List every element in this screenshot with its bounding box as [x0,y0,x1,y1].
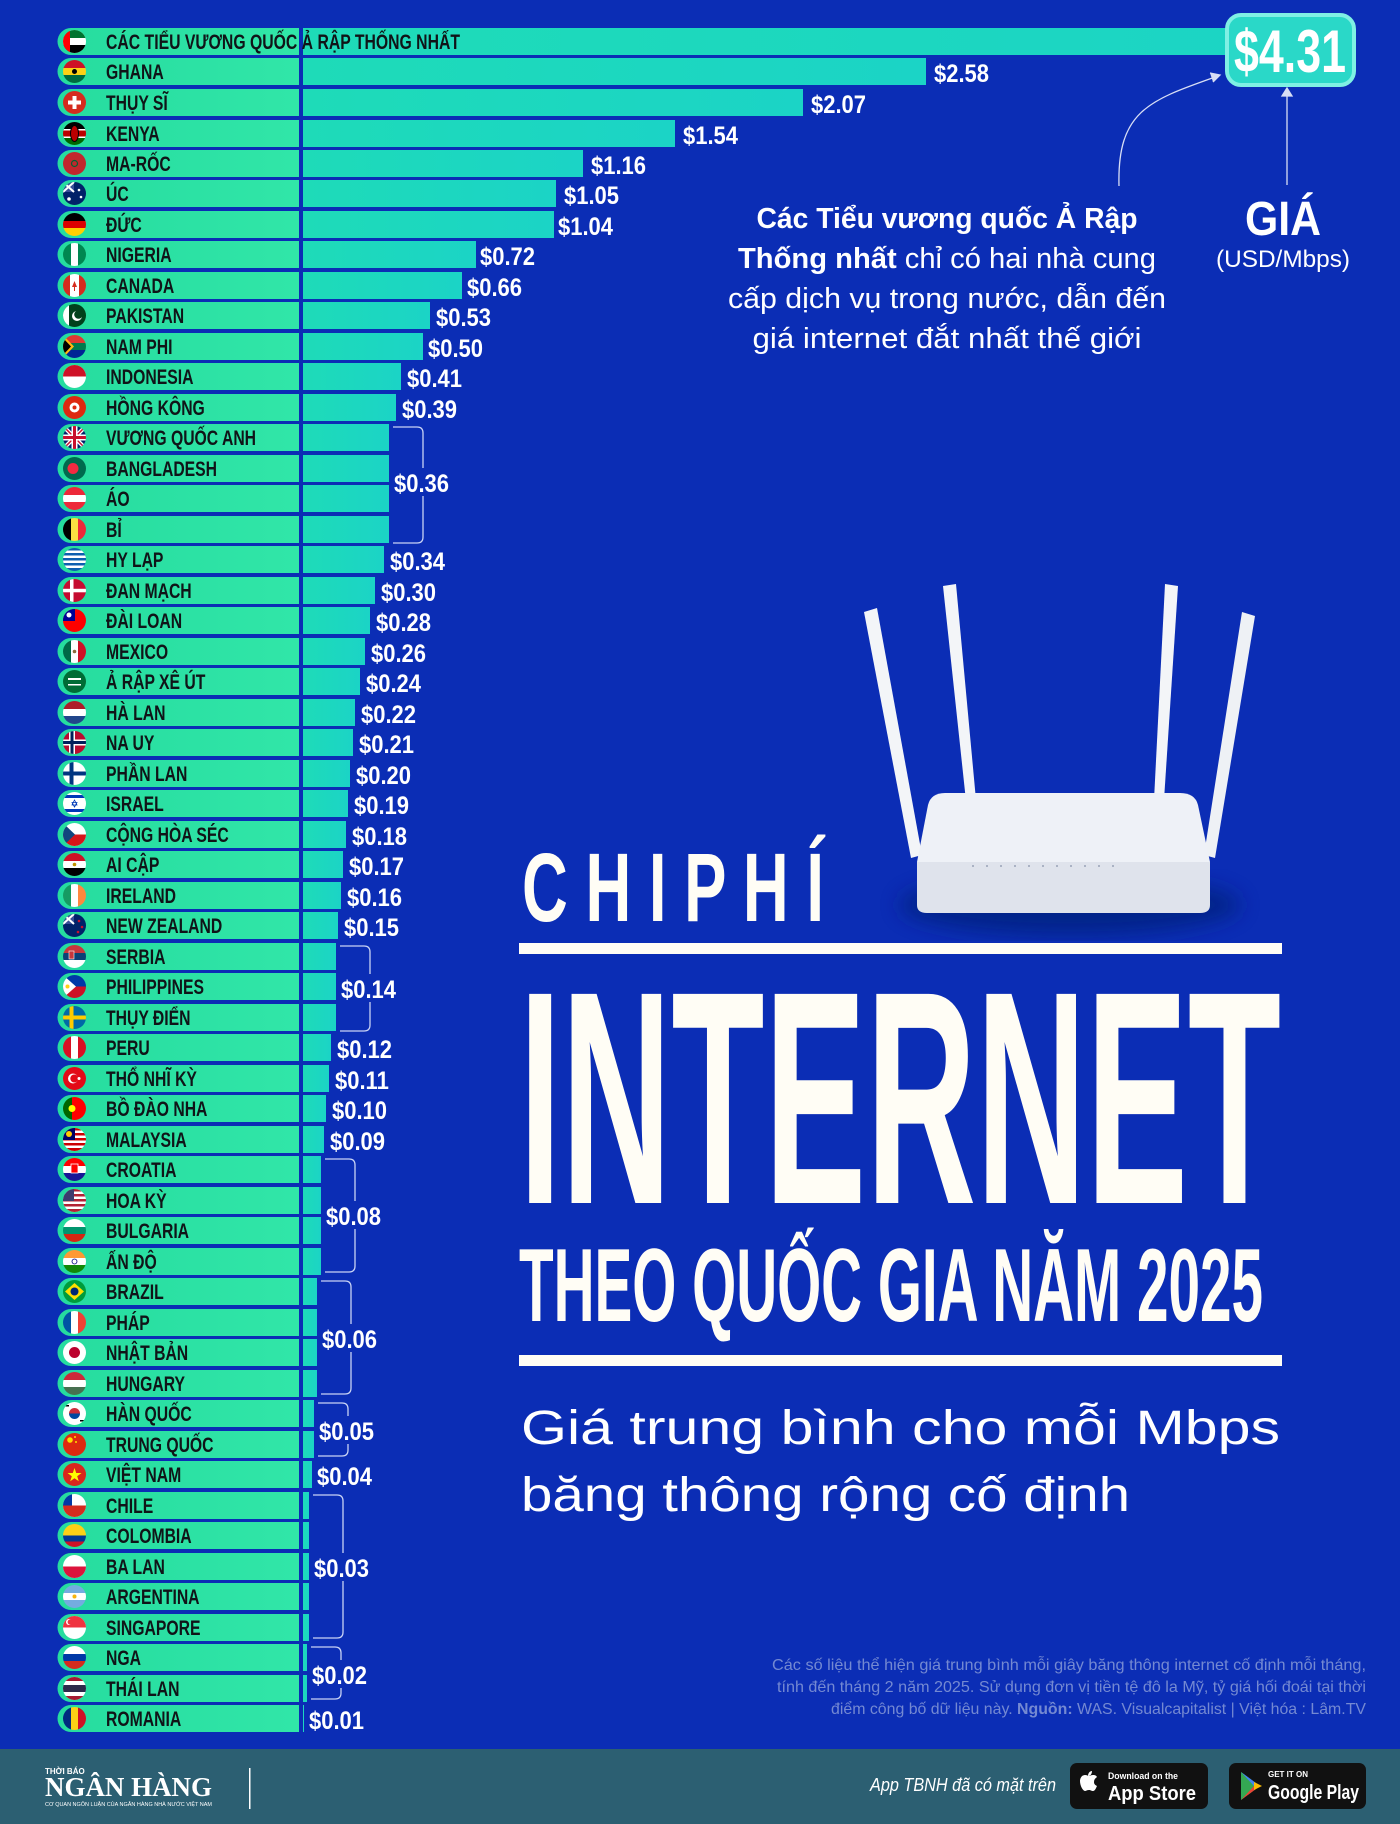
row: A Rap Xe Ut: Ả RẬP XÊ ÚT [106,670,206,694]
row: Singapore: SINGAPORE [106,1616,200,1640]
row: Thuy Si: THỤY SĨ [106,91,169,115]
row: Ao [58,485,389,512]
row: Malaysia: MALAYSIA [106,1128,187,1152]
row: Chile [58,1492,309,1519]
row: Croatia: CROATIA [106,1158,177,1182]
title: CHI PHI: C H I P H Í [522,833,826,942]
row: Bangladesh [58,455,389,482]
row: Indonesia: $0.41 [407,365,462,392]
row: Brazil [58,1278,317,1305]
group bracket: $0.05 [317,1403,377,1456]
row: Hungary [58,1370,317,1397]
row: Philippines [58,973,336,1000]
row: UAE: CÁC TIỂU VƯƠNG QUỐC Ả RẬP THỐNG NHẤT [106,30,460,54]
row: Peru: PERU [106,1036,150,1060]
row: Viet Nam [58,1461,372,1490]
row: Nga: NGA [106,1646,141,1670]
divider: bottom title line [519,1355,1282,1366]
badge: Google Play [1229,1763,1366,1809]
footnote: source: Các số liệu thể hiện giá trung bình mỗi giây băng thông internet cố định mỗi tháng, [772,1655,1366,1674]
row: Romania [58,1705,364,1734]
group bracket: $0.02 [310,1647,370,1699]
row: Uc: ÚC [106,182,129,206]
row: Ghana [58,58,989,87]
callout: UAE explanation [728,201,1166,355]
row: Nhat Ban: NHẬT BẢN [106,1341,188,1365]
row: Nhat Ban [58,1339,317,1366]
row: A Rap Xe Ut: $0.24 [366,670,421,697]
row: Israel: ISRAEL [106,792,164,816]
row: Nigeria [58,241,535,270]
row: Tho Nhi Ky: THỔ NHĨ KỲ [106,1067,197,1091]
row: Serbia: SERBIA [106,945,165,969]
row: Ma-roc [58,150,646,179]
row: Nga [58,1644,307,1671]
row: Tho Nhi Ky [58,1065,389,1094]
footnote: source [772,1655,1366,1718]
logo: Thoi bao Ngan hang: NGÂN HÀNG [45,1772,212,1802]
group bracket: $0.02: $0.02 [312,1662,367,1689]
row: Nigeria: $0.72 [480,243,535,270]
legend: GIA (USD/Mbps): (USD/Mbps) [1216,246,1350,273]
row: Canada [58,272,522,301]
row: Ma-roc: MA-RỐC [106,152,171,176]
logo: Thoi bao Ngan hang: THỜI BÁO [45,1767,85,1776]
row: Viet Nam: $0.04 [317,1463,372,1490]
row: Hoa Ky [58,1187,321,1214]
row: Dai Loan: ĐÀI LOAN [106,609,182,633]
row: Dai Loan [58,607,431,636]
row: Pakistan: $0.53 [436,304,491,331]
legend: GIA (USD/Mbps): GIÁ [1245,192,1321,246]
row: New Zealand [58,912,399,941]
row: Dan Mach: $0.30 [381,579,436,606]
row: Israel [58,790,409,819]
row: Vuong quoc Anh: VƯƠNG QUỐC ANH [106,426,256,450]
group bracket: $0.14: $0.14 [341,976,396,1003]
row: Croatia [58,1156,321,1183]
row: Na Uy [58,729,414,758]
row: Ireland: IRELAND [106,884,176,908]
row: Ba Lan [58,1553,309,1580]
row: Malaysia [58,1126,385,1155]
row: Bo Dao Nha [58,1095,387,1124]
icon: router [864,584,1255,935]
row: Uc [58,180,619,209]
group bracket: $0.08: $0.08 [326,1203,381,1230]
row: Nam Phi: NAM PHI [106,335,172,359]
badge: Google Play: GET IT ON [1268,1770,1308,1779]
badge: Google Play: Google Play [1268,1782,1360,1804]
row: Singapore [58,1614,309,1641]
row: Hy Lap: $0.34 [390,548,445,575]
row: Ai Cap: $0.17 [349,853,404,880]
row: Hungary: HUNGARY [106,1372,186,1396]
row: Thuy Si: $2.07 [811,91,866,118]
row: Colombia [58,1522,309,1549]
group bracket: $0.05: $0.05 [319,1418,374,1445]
row: Hy Lap [58,546,445,575]
row: Dan Mach: ĐAN MẠCH [106,579,192,603]
row: Duc [58,211,613,240]
group bracket: $0.03 [312,1495,372,1638]
row: An Do [58,1248,321,1275]
row: Phap [58,1309,317,1336]
badge: $4.31 top value: $4.31 [1234,18,1346,85]
subtitle: băng thông rộng cố định [521,1469,1130,1522]
row: Dan Mach [58,577,436,606]
row: Ghana: $2.58 [934,60,989,87]
row: Dai Loan: $0.28 [376,609,431,636]
row: Kenya [58,120,738,149]
row: Cong hoa Sec [58,821,407,850]
row: Ai Cap [58,851,404,880]
row: Serbia [58,943,336,970]
row: Ha Lan: HÀ LAN [106,701,165,725]
row: Phap: PHÁP [106,1311,150,1335]
row: Ha Lan [58,699,416,728]
row: Trung Quoc: TRUNG QUỐC [106,1433,214,1457]
row: Trung Quoc [58,1431,314,1458]
row: Thai Lan: THÁI LAN [106,1677,179,1701]
footnote: source: tính đến tháng 2 năm 2025. Sử dụng đơn vị tiền tệ đô la Mỹ, tỷ giá hối đoái tại thời [777,1679,1366,1696]
row: Phan Lan [58,760,411,789]
row: Han Quoc: HÀN QUỐC [106,1402,192,1426]
row: Na Uy: $0.21 [359,731,414,758]
row: Mexico: MEXICO [106,640,168,664]
row: Peru [58,1034,392,1063]
row: Phan Lan: $0.20 [356,762,411,789]
row: Bo Dao Nha: BỒ ĐÀO NHA [106,1097,207,1121]
arrow: callout to badge [1119,73,1220,186]
row: Kenya: KENYA [106,122,160,146]
row: Phan Lan: PHẦN LAN [106,762,187,786]
row: Bulgaria: BULGARIA [106,1219,189,1243]
row: Hong Kong: $0.39 [402,396,457,423]
row: Ghana: GHANA [106,60,164,84]
row: Israel: $0.19 [354,792,409,819]
row: A Rap Xe Ut [58,668,421,697]
row: Uc: $1.05 [564,182,619,209]
badge: App Store [1070,1763,1208,1809]
row: Nam Phi [58,333,483,362]
row: Pakistan [58,302,491,331]
legend: GIA (USD/Mbps) [1216,192,1350,273]
row: Bangladesh: BANGLADESH [106,457,217,481]
row: Canada: $0.66 [467,274,522,301]
row: Cong hoa Sec: CỘNG HÒA SÉC [106,823,229,847]
row: Nigeria: NIGERIA [106,243,172,267]
row: Vuong quoc Anh [58,424,389,451]
callout: UAE explanation: cấp dịch vụ trong nước, dẫn đến [728,282,1166,315]
row: Nam Phi: $0.50 [428,335,483,362]
group bracket: $0.14 [339,946,399,1031]
arrow: GIA label to badge [1282,88,1292,185]
row: Romania: ROMANIA [106,1707,181,1731]
callout: UAE explanation: Các Tiểu vương quốc Ả Rập [756,201,1138,235]
row: Bulgaria [58,1217,321,1244]
row: Indonesia [58,363,462,392]
callout: UAE explanation: giá internet đắt nhất thế giới [752,322,1142,355]
row: Duc: $1.04 [558,213,613,240]
row: Colombia: COLOMBIA [106,1524,192,1548]
row: Ba Lan: BA LAN [106,1555,165,1579]
row: Hy Lap: HY LẠP [106,548,163,572]
badge: App Store: App Store [1108,1783,1196,1805]
row: Thuy Dien: THỤY ĐIỂN [106,1006,191,1030]
row: Argentina: ARGENTINA [106,1585,200,1609]
row: New Zealand: $0.15 [344,914,399,941]
row: Ha Lan: $0.22 [361,701,416,728]
group bracket: $0.06 [320,1281,380,1394]
row: Chile: CHILE [106,1494,153,1518]
row: Indonesia: INDONESIA [106,365,193,389]
row: Thuy Dien [58,1004,336,1031]
row: Romania: $0.01 [309,1707,364,1734]
row: Canada: CANADA [106,274,174,298]
row: Kenya: $1.54 [683,122,738,149]
footer bar [0,1749,1400,1824]
group bracket: $0.36: $0.36 [394,470,449,497]
row: Viet Nam: VIỆT NAM [106,1463,181,1487]
footnote: source: điểm công bố dữ liệu này. Nguồn: WAS. Visualcapitalist | Việt hóa : Lâm.TV [831,1700,1366,1718]
group bracket: $0.06: $0.06 [322,1326,377,1353]
row: New Zealand: NEW ZEALAND [106,914,222,938]
row: Cong hoa Sec: $0.18 [352,823,407,850]
logo: Thoi bao Ngan hang: CƠ QUAN NGÔN LUẬN CỦA NGÂN HÀNG NHÀ NƯỚC VIỆT NAM [45,1800,212,1808]
row: Mexico [58,638,426,667]
row: Duc: ĐỨC [106,213,142,237]
callout: UAE explanation: Thống nhất chỉ có hai nhà cung [738,243,1156,275]
row: Thai Lan [58,1675,307,1702]
row: Pakistan: PAKISTAN [106,304,184,328]
row: Mexico: $0.26 [371,640,426,667]
group bracket: $0.08 [324,1159,384,1272]
row: Bi: BỈ [106,518,122,542]
divider: top title line [519,943,1282,954]
row: Brazil: BRAZIL [106,1280,164,1304]
row: UAE [58,28,1345,55]
row: Philippines: PHILIPPINES [106,975,204,999]
row: Ao: ÁO [106,487,130,511]
row: Ai Cap: AI CẬP [106,853,159,877]
row: Malaysia: $0.09 [330,1128,385,1155]
text: app available: App TBNH đã có mặt trên [869,1775,1056,1795]
row: An Do: ẤN ĐỘ [106,1250,157,1274]
group bracket: $0.36 [392,427,452,543]
row: Bo Dao Nha: $0.10 [332,1097,387,1124]
row: Peru: $0.12 [337,1036,392,1063]
subtitle [521,1401,1280,1522]
group bracket: $0.03: $0.03 [314,1555,369,1582]
row: Hoa Ky: HOA KỲ [106,1189,167,1213]
row: Tho Nhi Ky: $0.11 [335,1067,389,1094]
row: Bi [58,516,389,543]
row: Han Quoc [58,1400,314,1427]
row: Hong Kong [58,394,457,423]
subtitle: Giá trung bình cho mỗi Mbps [521,1401,1280,1455]
row: Ma-roc: $1.16 [591,152,646,179]
row: Hong Kong: HỒNG KÔNG [106,396,205,420]
row: Na Uy: NA UY [106,731,155,755]
row: Argentina [58,1583,309,1610]
row: Thuy Si [58,89,866,118]
badge: App Store: Download on the [1108,1771,1178,1781]
row: Ireland [58,882,402,911]
row: Ireland: $0.16 [347,884,402,911]
